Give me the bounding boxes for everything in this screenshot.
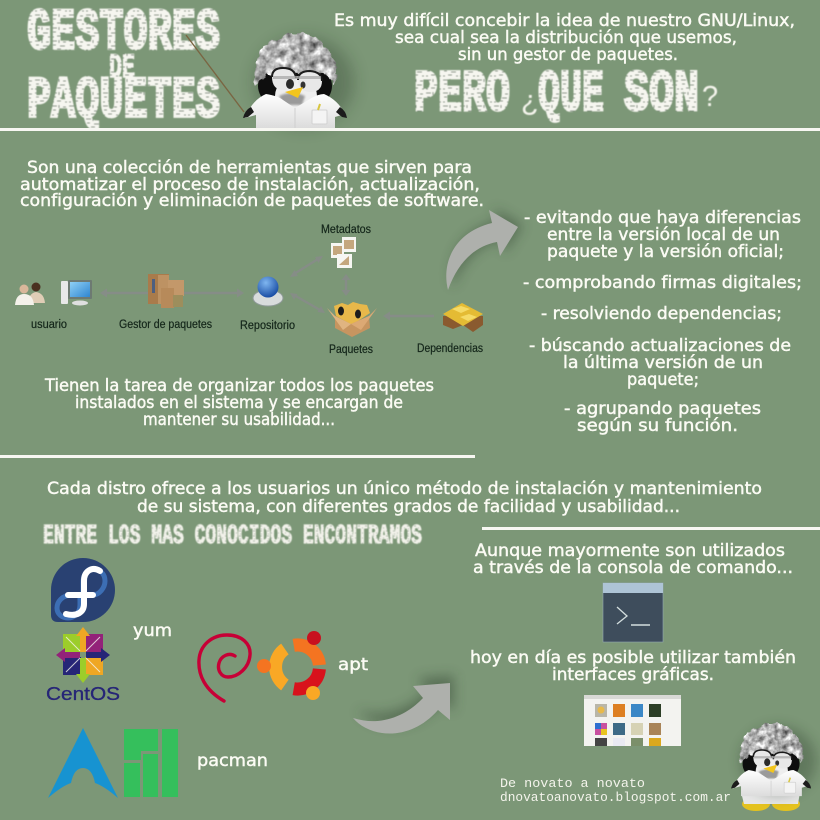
intro text	[334, 11, 795, 64]
heading: pero que son	[414, 63, 718, 128]
icon: repository globe	[253, 276, 283, 306]
icon: dependencies boxes	[443, 303, 483, 332]
distro text	[47, 479, 762, 516]
intro text: Es muy difícil concebir la idea de nuestro GNU/Linux,	[334, 11, 795, 30]
list of functions: la última versión de un	[563, 353, 763, 372]
label: usuario: usuario	[31, 319, 67, 331]
intro text: sin un gestor de paquetes.	[458, 45, 678, 64]
icon: professor penguin	[243, 33, 354, 128]
label: gestor de paquetes: Gestor de paquetes	[119, 319, 212, 331]
task text	[44, 376, 434, 429]
arrow: curved to list	[446, 208, 523, 290]
title: Gestores de paquetes: PAQUETES	[27, 70, 220, 134]
label: metadatos: Metadatos	[321, 224, 371, 236]
list of functions: - resolviendo dependencias;	[541, 304, 782, 323]
icon: fedora logo	[51, 558, 115, 622]
list of functions: paquete y la versión oficial;	[547, 242, 784, 261]
text: CentOS: CentOS	[46, 684, 120, 704]
list of functions: - comprobando firmas digitales;	[523, 273, 802, 292]
task text: instalados en el sistema y se encargan de	[75, 393, 403, 412]
divider right	[482, 527, 820, 530]
credits text: dnovatoanovato.blogspot.com.ar	[500, 791, 731, 805]
icon: software window	[584, 695, 681, 746]
divider middle	[0, 455, 475, 458]
task text: Tienen la tarea de organizar todos los paquetes	[44, 376, 434, 395]
diagram arrows	[100, 256, 434, 320]
icon: manjaro logo	[124, 729, 178, 797]
definition text	[20, 158, 484, 210]
console text: a través de la consola de comando...	[473, 558, 793, 577]
credits text	[500, 777, 731, 805]
definition text: configuración y eliminación de paquetes de software.	[20, 191, 484, 210]
distro text: de su sistema, con diferentes grados de facilidad y usabilidad...	[137, 497, 680, 516]
list of functions: según su función.	[577, 416, 738, 435]
definition text: Son una colección de herramientas que sirven para	[27, 158, 472, 177]
heading: pero que son: PERO	[414, 63, 510, 128]
icon: users	[15, 282, 45, 305]
pointer stick	[186, 35, 244, 112]
console text: Aunque mayormente son utilizados	[475, 541, 785, 560]
graphical interfaces text: interfaces gráficas.	[552, 665, 714, 684]
distro text: Cada distro ofrece a los usuarios un único método de instalación y mantenimiento	[47, 479, 762, 498]
heading: pero que son: ¿	[521, 85, 539, 117]
list of functions: - agrupando paquetes	[564, 399, 761, 418]
icon: debian logo	[199, 635, 250, 701]
label: apt: apt	[338, 655, 369, 674]
heading: entre los mas conocidos: ENTRE LOS MAS CONOCIDOS ENCONTRAMOS	[43, 522, 422, 552]
task text: mantener su usabilidad...	[143, 410, 335, 429]
list of functions: - evitando que haya diferencias	[524, 208, 801, 227]
label: pacman: pacman	[197, 751, 268, 770]
graphical interfaces text: hoy en día es posible utilizar también	[470, 648, 796, 667]
icon: cardboard boxes	[148, 274, 184, 308]
icon: ubuntu logo	[257, 631, 321, 700]
label: repositorio: Repositorio	[240, 320, 295, 332]
divider top	[0, 128, 820, 131]
list of functions	[523, 208, 802, 435]
list of functions: - búscando actualizaciones de	[529, 336, 791, 355]
title: Gestores de paquetes	[27, 2, 220, 134]
graphical interfaces text	[470, 648, 796, 684]
intro text: sea cual sea la distribución que usemos,	[395, 28, 737, 47]
title: Gestores de paquetes: DE	[109, 50, 135, 88]
icon: arch logo	[48, 728, 118, 798]
list of functions: entre la versión local de un	[547, 225, 780, 244]
title: Gestores de paquetes: GESTORES	[27, 2, 220, 66]
list of functions: paquete;	[627, 370, 699, 389]
label: paquetes: Paquetes	[329, 344, 373, 356]
icon: small penguin	[731, 723, 816, 811]
arrow: curved to interfaces	[353, 675, 454, 734]
heading: pero que son: ?	[702, 81, 718, 113]
icon: terminal	[603, 583, 663, 642]
console text	[473, 541, 793, 577]
heading: pero que son: SON	[624, 63, 699, 128]
label: dependencias: Dependencias	[417, 343, 483, 355]
definition text: automatizar el proceso de instalación, actualización,	[20, 175, 480, 194]
icon: packages box	[327, 302, 377, 337]
diagram: package manager flow	[15, 224, 483, 356]
credits text: De novato a novato	[500, 777, 645, 791]
label: yum: yum	[133, 621, 172, 640]
icon: computer	[61, 280, 92, 306]
icon: metadata documents	[331, 237, 356, 268]
icon: centos logo	[46, 627, 120, 704]
heading: pero que son: QUE	[538, 63, 604, 128]
